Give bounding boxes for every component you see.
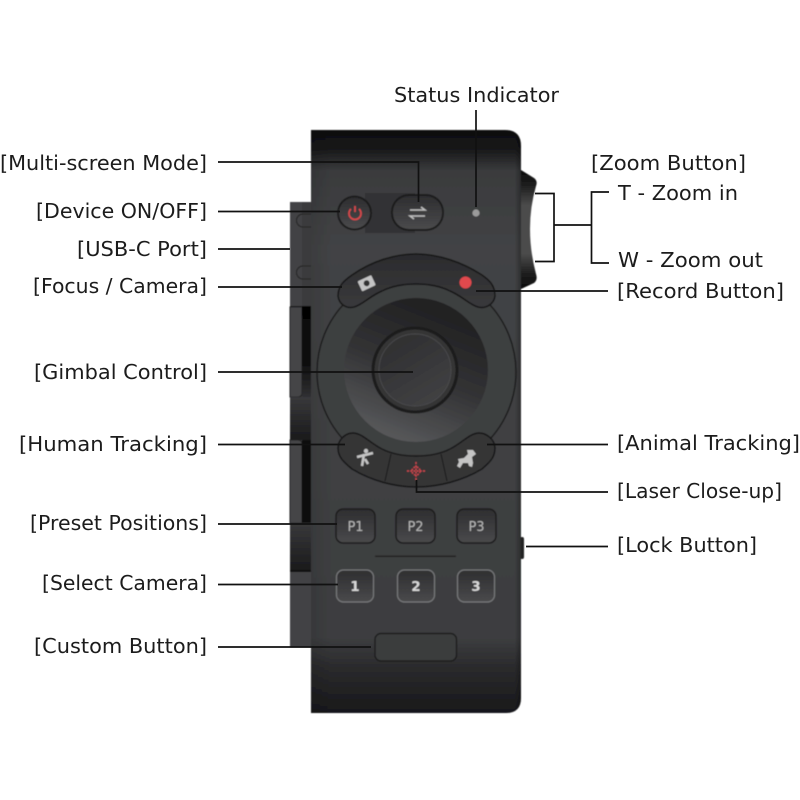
leader: device on/off bbox=[218, 210, 340, 212]
button recess bbox=[365, 193, 415, 233]
preset buttons: P3 bbox=[468, 520, 485, 535]
multi-screen button bbox=[391, 194, 444, 231]
main body bbox=[311, 130, 521, 713]
label: preset positions: [Preset Positions] bbox=[30, 511, 207, 535]
label: human tracking: [Human Tracking] bbox=[19, 432, 207, 456]
divider bbox=[375, 556, 456, 557]
gimbal ring bbox=[317, 272, 516, 472]
custom button bbox=[375, 634, 456, 661]
leader: human tracking bbox=[218, 444, 345, 446]
side rail bbox=[290, 202, 311, 647]
joystick bbox=[372, 326, 458, 414]
label: lock button: [Lock Button] bbox=[617, 533, 757, 557]
leader: custom button bbox=[218, 646, 371, 648]
leader: status indicator bbox=[475, 110, 477, 207]
preset buttons bbox=[336, 509, 496, 543]
top arc button bbox=[338, 254, 495, 307]
label: zoom button: [Zoom Button] bbox=[591, 151, 746, 175]
label: custom button: [Custom Button] bbox=[34, 634, 207, 658]
leader: preset positions bbox=[218, 523, 337, 525]
label: usb-c port: [USB-C Port] bbox=[77, 237, 207, 261]
label: select camera: [Select Camera] bbox=[42, 571, 207, 595]
icon: record dot bbox=[460, 276, 472, 288]
label: multi-screen mode: [Multi-screen Mode] bbox=[0, 151, 207, 175]
power button bbox=[337, 196, 372, 230]
leader: focus / camera bbox=[218, 286, 342, 288]
device: remote controller bbox=[290, 130, 537, 713]
label: laser close-up: [Laser Close-up] bbox=[617, 479, 782, 503]
camera select buttons: 1 bbox=[350, 579, 360, 595]
icon: human bbox=[357, 449, 373, 466]
preset buttons: P1 bbox=[347, 520, 364, 535]
label: zoom in: T - Zoom in bbox=[617, 181, 738, 205]
leader: lock button bbox=[526, 546, 608, 548]
preset buttons: P2 bbox=[407, 520, 424, 535]
lock button bbox=[520, 537, 524, 559]
leader: laser close-up bbox=[416, 480, 608, 492]
label: animal tracking: [Animal Tracking] bbox=[617, 431, 800, 455]
icon: dog bbox=[457, 450, 476, 468]
bottom arc button bbox=[338, 433, 495, 487]
status LED bbox=[472, 209, 480, 217]
icon: swap arrows bbox=[410, 207, 425, 219]
label: gimbal control: [Gimbal Control] bbox=[34, 360, 207, 384]
leader: gimbal control bbox=[218, 371, 413, 373]
leader: zoom bracket bbox=[535, 192, 609, 263]
icon: power bbox=[349, 206, 361, 219]
label: focus / camera: [Focus / Camera] bbox=[33, 274, 207, 298]
leader: usb-c port bbox=[218, 248, 290, 250]
leader: multi-screen mode bbox=[218, 162, 418, 202]
camera select buttons: 2 bbox=[411, 579, 421, 595]
camera select buttons: 3 bbox=[471, 579, 481, 595]
leader: record button bbox=[476, 290, 608, 292]
icon: laser crosshair bbox=[407, 462, 425, 480]
zoom rocker bbox=[521, 170, 537, 289]
icon: camera bbox=[358, 275, 376, 291]
leader: select camera bbox=[218, 584, 338, 586]
label: record button: [Record Button] bbox=[617, 279, 784, 303]
gimbal bowl bbox=[344, 298, 488, 442]
label: status indicator: Status Indicator bbox=[394, 83, 560, 107]
camera select buttons bbox=[336, 570, 494, 602]
label: device on/off: [Device ON/OFF] bbox=[36, 199, 207, 223]
label: zoom out: W - Zoom out bbox=[618, 248, 763, 272]
leader: animal tracking bbox=[487, 444, 608, 446]
